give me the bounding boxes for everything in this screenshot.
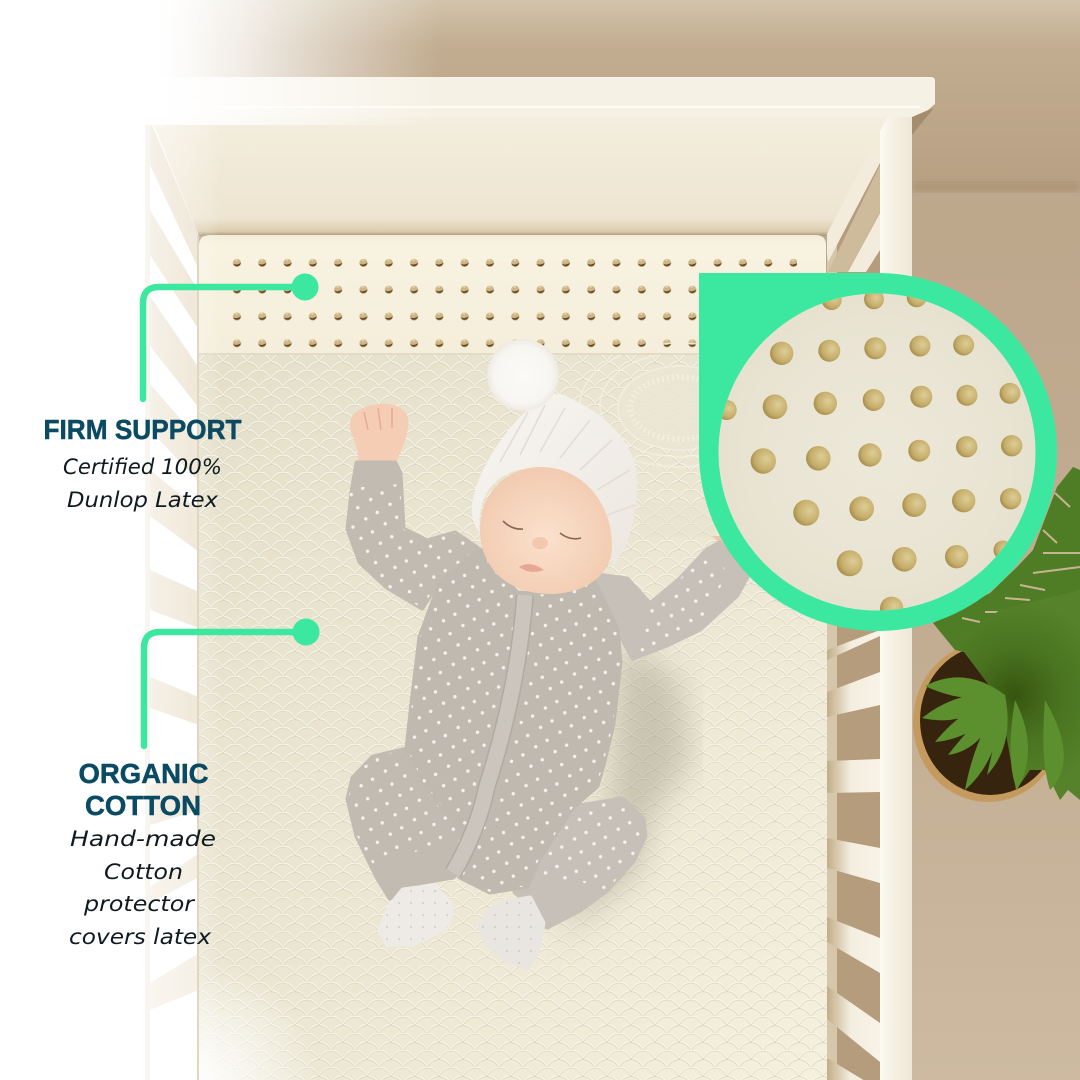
text: organic cotton: Hand-made [70,827,216,851]
quilted medallion [580,343,780,467]
crib top rail [130,77,935,135]
left leg [348,749,470,898]
left arm [348,463,477,608]
soil [920,645,1060,795]
torso [407,550,620,892]
text: organic cotton: COTTON [85,790,201,821]
mattress: organic cotton cover [199,343,827,1080]
green teardrop frame [699,273,1057,631]
text: firm support [44,414,242,512]
pompom [487,339,559,411]
text: organic cotton: protector [83,892,196,916]
text: firm support: FIRM SUPPORT [44,414,242,445]
crib right side slats [825,118,881,1080]
white fade over left side [0,0,220,1080]
left hand [350,404,408,464]
white fade over wall and rail at top left [0,0,440,125]
crib headboard interior [150,116,888,236]
text: firm support: Certified 100% [63,455,222,479]
eyes nose mouth [503,521,581,539]
text: organic cotton: covers latex [69,925,212,949]
right leg [515,799,645,927]
right arm [597,536,748,658]
left sock [380,886,453,944]
right sock [480,898,543,968]
baby [348,339,748,968]
left side slats [0,118,199,1080]
latex texture circle [718,294,1036,610]
face [480,467,612,594]
text: firm support: Dunlop Latex [67,488,219,512]
fade at foot of mattress [199,960,319,1080]
text: organic cotton [69,758,216,949]
fern upper frond [933,467,1080,680]
zoom callout: latex close-up [699,273,1057,631]
callout: firm support leader line [143,274,318,399]
baby shadow [560,640,690,940]
fern centre mass [955,590,1080,800]
pot [913,642,1063,802]
latex pin holes [717,287,1022,620]
plant in pot [913,467,1080,802]
text: organic cotton: ORGANIC [78,758,208,789]
zipper [453,595,525,873]
text: organic cotton: Cotton [104,860,183,884]
hat [472,394,637,566]
mattress: latex core [199,235,826,356]
crib right post [880,116,912,1080]
fern leaflets [922,677,1064,790]
callout: organic cotton leader line [144,618,320,746]
